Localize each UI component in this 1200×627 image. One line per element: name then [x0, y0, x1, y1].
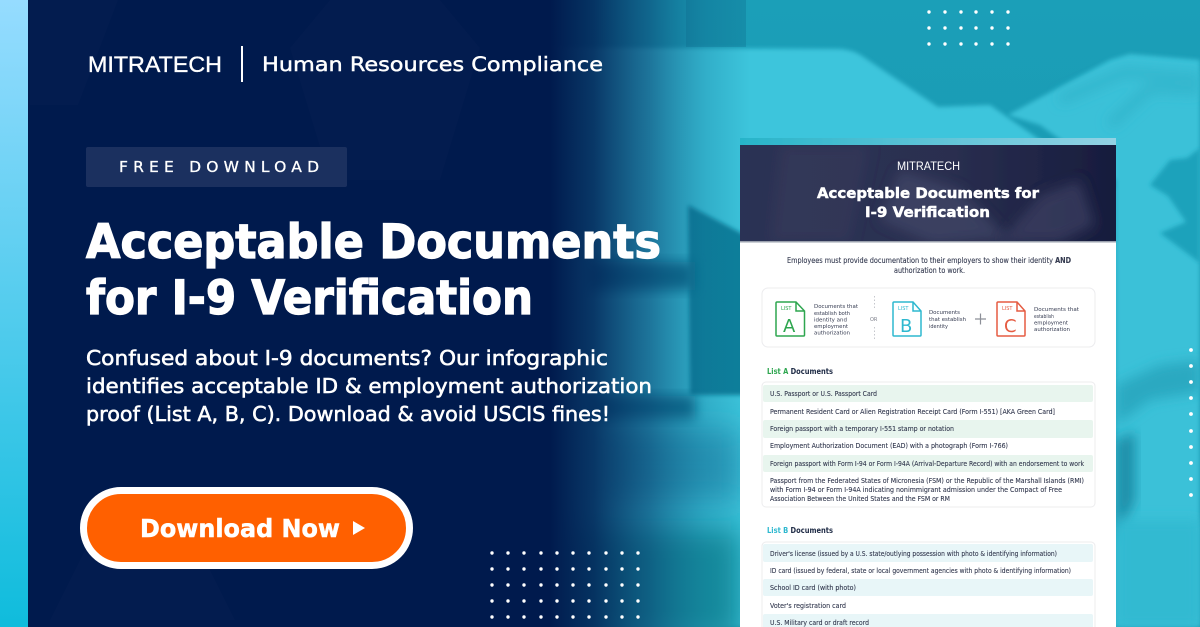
icon: list A: [776, 302, 804, 337]
button: download now: [84, 490, 410, 566]
badge: free download: [86, 147, 347, 187]
list B description: that establish: [929, 317, 967, 323]
list A table: Passport from the Federated States of Micronesia (FSM) or the Republic of the Marshall Islands (RMI): [770, 476, 1084, 485]
dot grid: bottom: [490, 551, 640, 619]
plus sign: [975, 314, 986, 324]
description text: proof (List A, B, C). Download & avoid USCIS fines!: [86, 402, 610, 426]
list A description: employment: [814, 324, 849, 330]
list B heading: List B Documents: [767, 526, 833, 535]
document header: I-9 Verification: [865, 205, 990, 221]
list A description: Documents that: [814, 304, 859, 310]
description text: identifies acceptable ID & employment authorization: [86, 374, 652, 398]
list A table: with Form I-94 or Form I-94A indicating nonimmigrant admission under the Compact of Free: [770, 485, 1062, 494]
navy panel with gradient fade: [28, 0, 750, 627]
list A heading: List A Documents: [767, 367, 833, 376]
document header: [740, 145, 1116, 242]
badge: free download: FREE DOWNLOAD: [119, 158, 319, 176]
document page: [740, 138, 1116, 627]
left accent strip: [0, 0, 28, 627]
description text: Confused about I-9 documents? Our infographic: [86, 346, 608, 370]
list C description: Documents that: [1034, 307, 1080, 313]
list A description: authorization: [814, 330, 851, 336]
list B table: School ID card (with photo): [770, 583, 856, 592]
logo divider: [241, 46, 243, 82]
icon: list A: A: [783, 316, 796, 337]
document top bar: [740, 138, 1116, 145]
document header: MITRATECH: [897, 159, 960, 173]
list B table: U.S. Military card or draft record: [770, 618, 869, 627]
icon: list B: [893, 302, 921, 337]
list B description: Documents: [929, 310, 960, 316]
list A table: Foreign passport with Form I-94 or Form I-94A (Arrival-Departure Record) with an endorsement to work: [770, 459, 1085, 468]
title: Acceptable Documents: [86, 215, 661, 270]
document preview: [740, 138, 1116, 627]
document intro text: [787, 256, 1071, 275]
list A description: establish both: [814, 311, 850, 317]
dot grid: top: [927, 10, 1010, 46]
list summary card: [762, 288, 1095, 347]
button: download now: Download Now: [140, 514, 340, 543]
list B description: [929, 310, 967, 330]
list A table: Association Between the United States and the FSM or RM: [770, 494, 950, 503]
or separator: OR: [870, 317, 878, 323]
title: for I-9 Verification: [86, 271, 533, 326]
list A table: Permanent Resident Card or Alien Registration Receipt Card (Form I-551) [AKA Green Card]: [770, 407, 1055, 416]
list A table: [762, 382, 1095, 507]
list A table: U.S. Passport or U.S. Passport Card: [770, 389, 877, 398]
list C description: establish: [1034, 314, 1054, 320]
subheading: Human Resources Compliance: Human Resources Compliance: [262, 53, 603, 76]
icon: list A: LIST: [781, 306, 792, 312]
list B table: [762, 542, 1095, 627]
list A description: identity and: [814, 318, 847, 324]
list B table: Driver's license (issued by a U.S. state/outlying possession with photo & identifying information): [770, 549, 1057, 558]
icon: list C: C: [1004, 316, 1017, 337]
list A table: Foreign passport with a temporary I-551 stamp or notation: [770, 424, 954, 433]
icon: list C: LIST: [1002, 306, 1013, 312]
list B table: ID card (issued by federal, state or local government agencies with photo & identifying information): [770, 566, 1071, 575]
list B description: identity: [929, 324, 949, 330]
description text: [86, 346, 652, 426]
document intro text: authorization to work.: [894, 266, 965, 275]
dot grid: right: [1189, 348, 1193, 497]
list B table: Voter's registration card: [770, 601, 846, 610]
list C description: [1034, 307, 1080, 333]
document intro text: Employees must provide documentation to their employers to show their identity AND: [787, 256, 1071, 265]
title: [86, 215, 661, 326]
document header: Acceptable Documents for: [817, 186, 1040, 202]
list A table: Employment Authorization Document (EAD) with a photograph (Form I-766): [770, 441, 1008, 450]
or separator: [870, 296, 878, 340]
list C description: authorization: [1034, 327, 1071, 333]
list C description: employment: [1034, 320, 1069, 326]
list A description: [814, 304, 859, 336]
logo: Mitratech: MITRATECH: [88, 52, 222, 77]
icon: list B: LIST: [898, 306, 909, 312]
icon: list B: B: [900, 316, 912, 337]
icon: list C: [997, 302, 1025, 337]
